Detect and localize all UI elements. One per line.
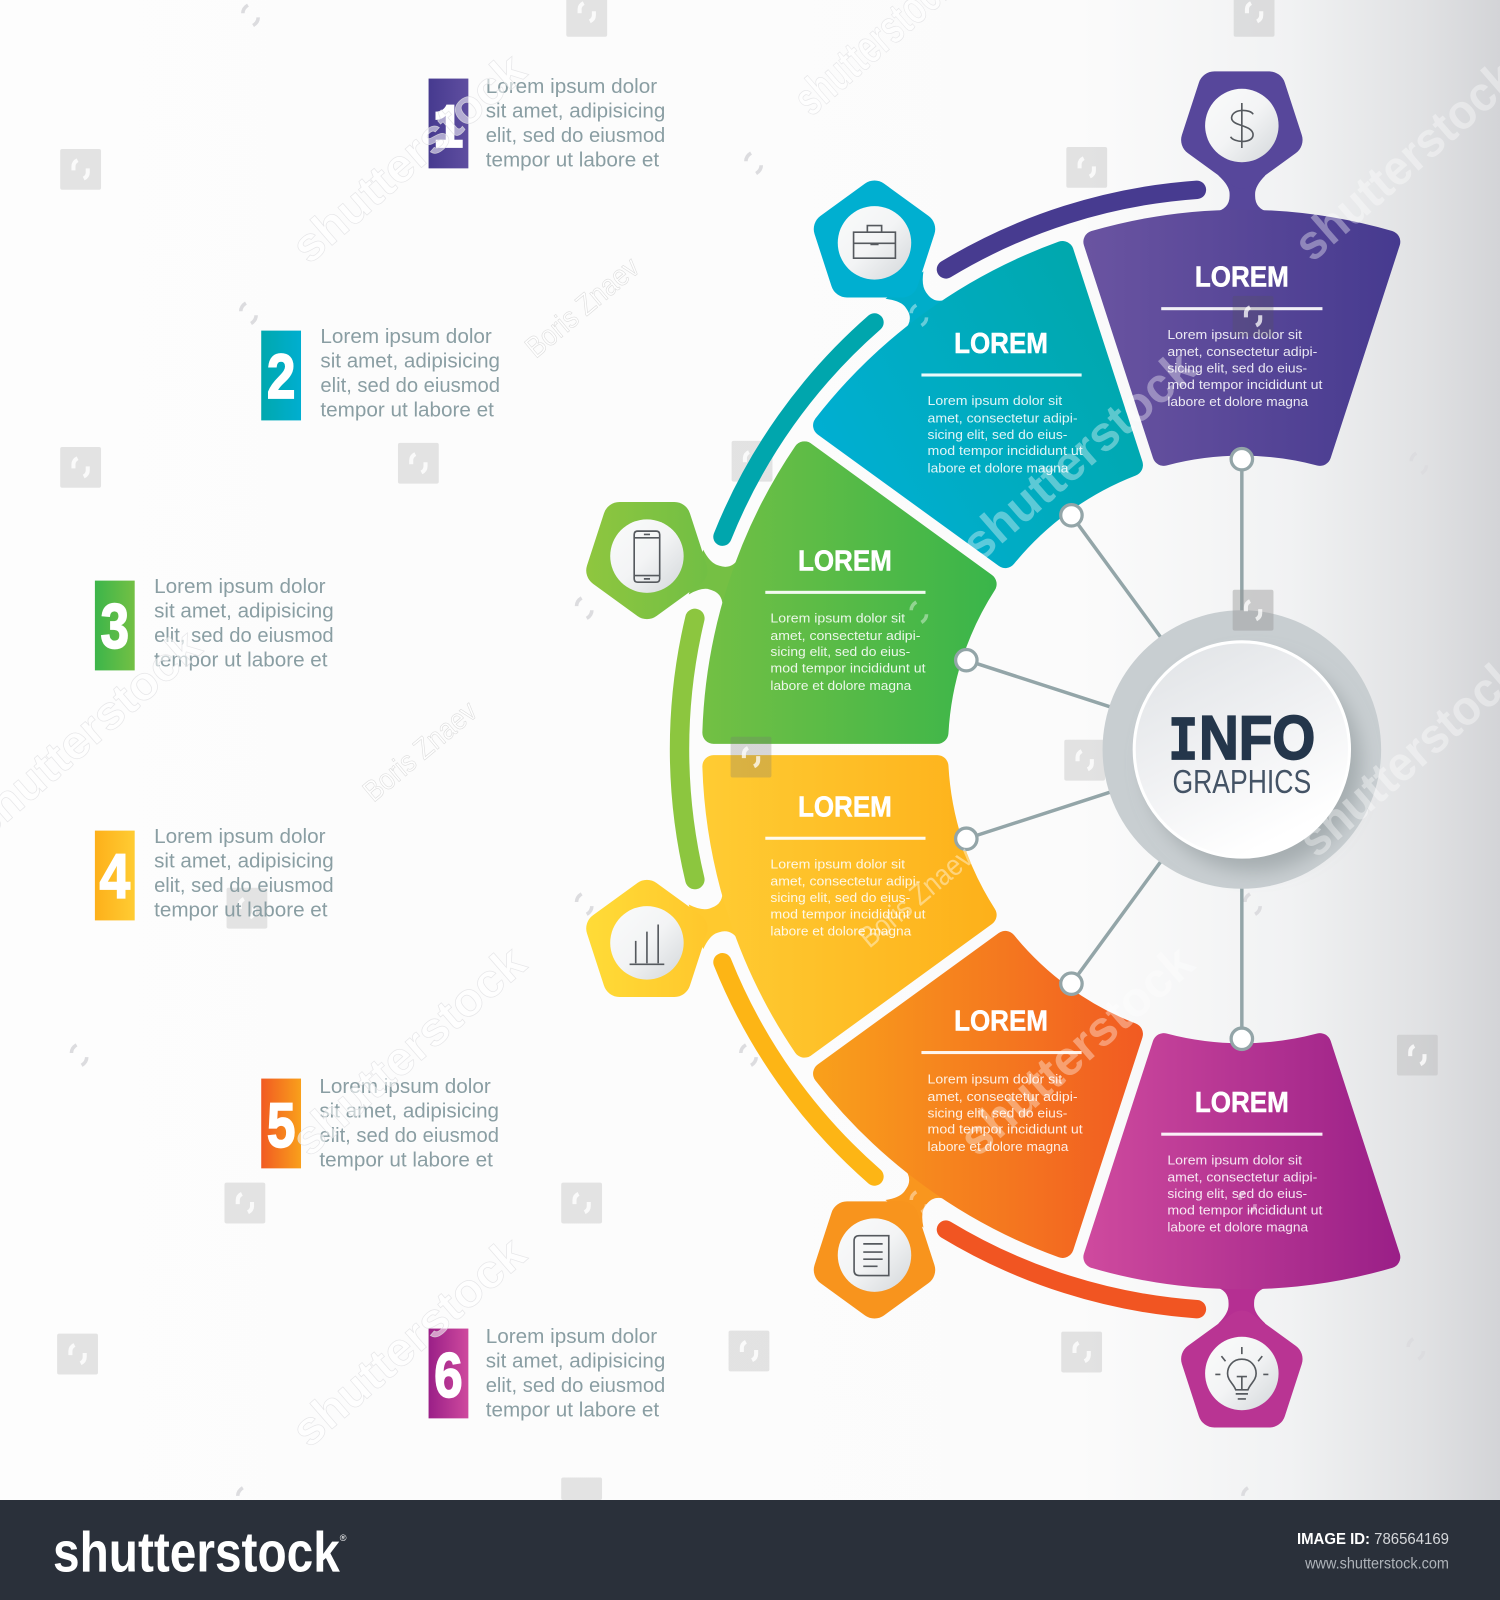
registered mark: ® <box>340 1533 347 1543</box>
item text 3: tempor ut labore et <box>154 649 328 671</box>
hub disc <box>1134 642 1349 857</box>
item text 5 <box>319 1076 499 1171</box>
item text 1: tempor ut labore et <box>486 149 660 171</box>
segment 3: green panel <box>603 453 985 880</box>
item text 4 <box>154 826 334 921</box>
panel body text 1: sicing elit, sed do eius- <box>1167 360 1307 375</box>
item text 4: sit amet, adipisicing <box>154 850 334 872</box>
panel heading 5: LOREM <box>954 1006 1048 1038</box>
numeral 6: 6 <box>434 1341 463 1411</box>
panel body text 1: labore et dolore magna <box>1167 394 1309 409</box>
item text 6 <box>486 1326 665 1421</box>
watermark text: shutterstock <box>951 340 1207 572</box>
watermark text: Boris Znaev <box>519 251 646 365</box>
hub disc shadow <box>1145 655 1361 871</box>
stem 2 <box>882 269 948 331</box>
panel body 5 <box>824 942 1132 1247</box>
panel body 1 <box>1095 221 1389 455</box>
item text 3 <box>154 576 334 671</box>
item text 3: Lorem ipsum dolor <box>154 576 326 598</box>
pentagon badge 2 <box>830 197 919 281</box>
item text 6: tempor ut labore et <box>486 1399 660 1421</box>
panel body text 1: Lorem ipsum dolor sit <box>1167 327 1302 342</box>
panel body text 5: labore et dolore magna <box>928 1139 1069 1154</box>
list item 4 <box>95 826 334 921</box>
number tab 1 <box>429 79 468 168</box>
panel heading 4: LOREM <box>798 791 892 823</box>
panel body text 6: labore et dolore magna <box>1167 1220 1309 1235</box>
pentagon badge 5 <box>830 1218 919 1302</box>
arc bar 4 <box>722 962 874 1177</box>
item text 5: tempor ut labore et <box>319 1149 493 1171</box>
panel rule 6 <box>1161 1133 1322 1136</box>
footer banner <box>0 1500 1500 1600</box>
panel body text 3 <box>770 610 926 693</box>
segment 4: yellow panel <box>603 766 985 1177</box>
panel body 2 <box>824 252 1132 557</box>
segment 6: magenta panel <box>1095 1044 1389 1411</box>
list item 6 <box>429 1326 665 1421</box>
item text 1: sit amet, adipisicing <box>486 100 665 122</box>
item text 4: Lorem ipsum dolor <box>154 826 326 848</box>
panel body text 6: Lorem ipsum dolor sit <box>1167 1152 1302 1167</box>
segment 2: teal panel <box>722 197 1132 557</box>
panel body 4 <box>714 766 985 1046</box>
watermark text: shutterstock <box>282 42 536 273</box>
panel body text 5 <box>928 1072 1083 1154</box>
arc bar 3 <box>680 618 695 880</box>
panel rule 2 <box>921 373 1082 377</box>
connector nodes <box>956 448 1253 1049</box>
panel body text 5: mod tempor incididunt ut <box>928 1122 1083 1137</box>
watermark text: Boris Znaev <box>357 694 484 808</box>
panel heading 6: LOREM <box>1195 1087 1289 1119</box>
stem 6 <box>1214 1287 1269 1323</box>
list item 3 <box>95 576 334 671</box>
item text 6: elit, sed do eiusmod <box>486 1375 665 1397</box>
central hub <box>1103 610 1381 889</box>
stem 3 <box>687 546 739 610</box>
pentagon badge 1 <box>1197 88 1286 172</box>
hub outer ring <box>1103 610 1381 889</box>
panel rule 1 <box>1161 307 1322 310</box>
watermark text: shutterstock <box>282 1226 536 1457</box>
panel rule 3 <box>765 591 926 594</box>
icon: bar chart <box>610 906 684 980</box>
segment 1: purple panel <box>946 88 1389 455</box>
panel body text 4: sicing elit, sed do eius- <box>770 890 910 905</box>
arc bar 2 <box>722 322 874 537</box>
item text 1 <box>486 76 665 171</box>
icon: briefcase <box>838 206 911 280</box>
stem 1 <box>1214 176 1269 212</box>
panel body text 5: sicing elit, sed do eius- <box>928 1105 1067 1120</box>
panel body text 2 <box>928 393 1083 475</box>
segment 5: orange panel <box>824 942 1197 1309</box>
panel rule 5 <box>921 1051 1082 1054</box>
panel body text 2: amet, consectetur adipi- <box>928 410 1078 425</box>
number tab 4 <box>95 831 135 920</box>
numeral 2: 2 <box>267 342 295 412</box>
icon: light bulb <box>1205 1337 1279 1410</box>
panel body 6 <box>1095 1044 1389 1278</box>
panel body text 1 <box>1167 327 1323 409</box>
icon: document <box>838 1218 911 1292</box>
stem 5 <box>882 1168 948 1230</box>
item text 5: Lorem ipsum dolor <box>319 1076 491 1098</box>
panel body text 1: mod tempor incididunt ut <box>1167 377 1323 392</box>
panel body text 3: sicing elit, sed do eius- <box>770 644 910 659</box>
panel body text 6: mod tempor incididunt ut <box>1167 1202 1323 1217</box>
item text 2: sit amet, adipisicing <box>320 350 500 372</box>
site url: www.shutterstock.com <box>1304 1555 1449 1572</box>
panel heading 2: LOREM <box>954 328 1048 360</box>
panel body text 3: mod tempor incididunt ut <box>770 660 926 675</box>
panel rule 4 <box>765 837 926 840</box>
panel body text 6: amet, consectetur adipi- <box>1167 1170 1317 1185</box>
arc bar 5 <box>946 1230 1197 1309</box>
item text 3: sit amet, adipisicing <box>154 600 334 622</box>
item text 2: tempor ut labore et <box>320 399 494 421</box>
numeral 3: 3 <box>101 592 129 662</box>
number tab 6 <box>429 1329 468 1418</box>
item text 3: elit, sed do eiusmod <box>154 625 334 647</box>
numeral 1: 1 <box>433 94 464 166</box>
banner background <box>0 1500 1500 1600</box>
panel body text 3: labore et dolore magna <box>770 678 912 693</box>
stem 4 <box>687 889 739 953</box>
number tab 5 <box>261 1079 301 1168</box>
item text 1: Lorem ipsum dolor <box>486 76 658 98</box>
panel heading 3: LOREM <box>798 545 892 577</box>
item text 5: sit amet, adipisicing <box>319 1100 499 1122</box>
hub title INFO: NFO <box>1199 704 1315 773</box>
watermark tiles over artwork <box>731 296 1273 1212</box>
image id: IMAGE ID: 786564169 <box>1297 1531 1449 1548</box>
item text 1: elit, sed do eiusmod <box>486 125 665 147</box>
panel body text 4: mod tempor incididunt ut <box>770 906 926 921</box>
list item 1 <box>429 76 665 171</box>
number tab 3 <box>95 581 135 670</box>
panel body text 5: Lorem ipsum dolor sit <box>928 1072 1063 1087</box>
item text 6: sit amet, adipisicing <box>486 1350 665 1372</box>
hub subtitle GRAPHICS: GRAPHICS <box>1172 764 1311 801</box>
list item 5 <box>261 1076 499 1171</box>
panel body text 2: sicing elit, sed do eius- <box>928 427 1067 442</box>
numeral 5: 5 <box>267 1091 295 1161</box>
panel body text 4: labore et dolore magna <box>770 924 912 939</box>
panel body text 6: sicing elit, sed do eius- <box>1167 1186 1307 1201</box>
watermark text: shutterstock <box>282 935 536 1166</box>
panel body text 4: amet, consectetur adipi- <box>770 874 920 889</box>
panel body text 5: amet, consectetur adipi- <box>928 1089 1078 1104</box>
panel body text 4: Lorem ipsum dolor sit <box>770 856 905 871</box>
panel body text 2: mod tempor incididunt ut <box>928 443 1083 458</box>
item text 2: Lorem ipsum dolor <box>320 326 492 348</box>
pentagon badge 3 <box>603 518 691 603</box>
panel body text 2: labore et dolore magna <box>928 460 1069 475</box>
panel body text 2: Lorem ipsum dolor sit <box>928 393 1063 408</box>
item text 5: elit, sed do eiusmod <box>319 1125 499 1147</box>
watermark text: Boris Znaev <box>853 840 980 954</box>
list item 2 <box>261 326 500 421</box>
panel body text 6 <box>1167 1152 1323 1235</box>
icon: phone <box>610 519 684 593</box>
panel body text 4 <box>770 856 926 939</box>
panel body 3 <box>714 453 985 733</box>
panel body text 1: amet, consectetur adipi- <box>1167 344 1317 359</box>
hub title INFO: I <box>1168 707 1198 778</box>
item text 4: elit, sed do eiusmod <box>154 875 334 897</box>
connector lines from hub to panels <box>966 459 1242 1039</box>
panel body text 3: amet, consectetur adipi- <box>770 628 920 643</box>
panel body text 3: Lorem ipsum dolor sit <box>770 610 905 625</box>
number tab 2 <box>261 331 301 420</box>
numeral 4: 4 <box>99 842 130 912</box>
item text 2 <box>320 326 500 421</box>
arc bar 1 <box>946 190 1197 269</box>
item text 2: elit, sed do eiusmod <box>320 375 500 397</box>
icon: dollar <box>1205 89 1279 162</box>
watermark text: shutterstock <box>949 934 1205 1166</box>
banner logo: shutterstock <box>53 1520 340 1583</box>
panel heading 1: LOREM <box>1195 262 1289 294</box>
item text 6: Lorem ipsum dolor <box>486 1326 658 1348</box>
pentagon badge 4 <box>603 896 691 981</box>
pentagon badge 6 <box>1197 1327 1286 1411</box>
item text 4: tempor ut labore et <box>154 899 328 921</box>
